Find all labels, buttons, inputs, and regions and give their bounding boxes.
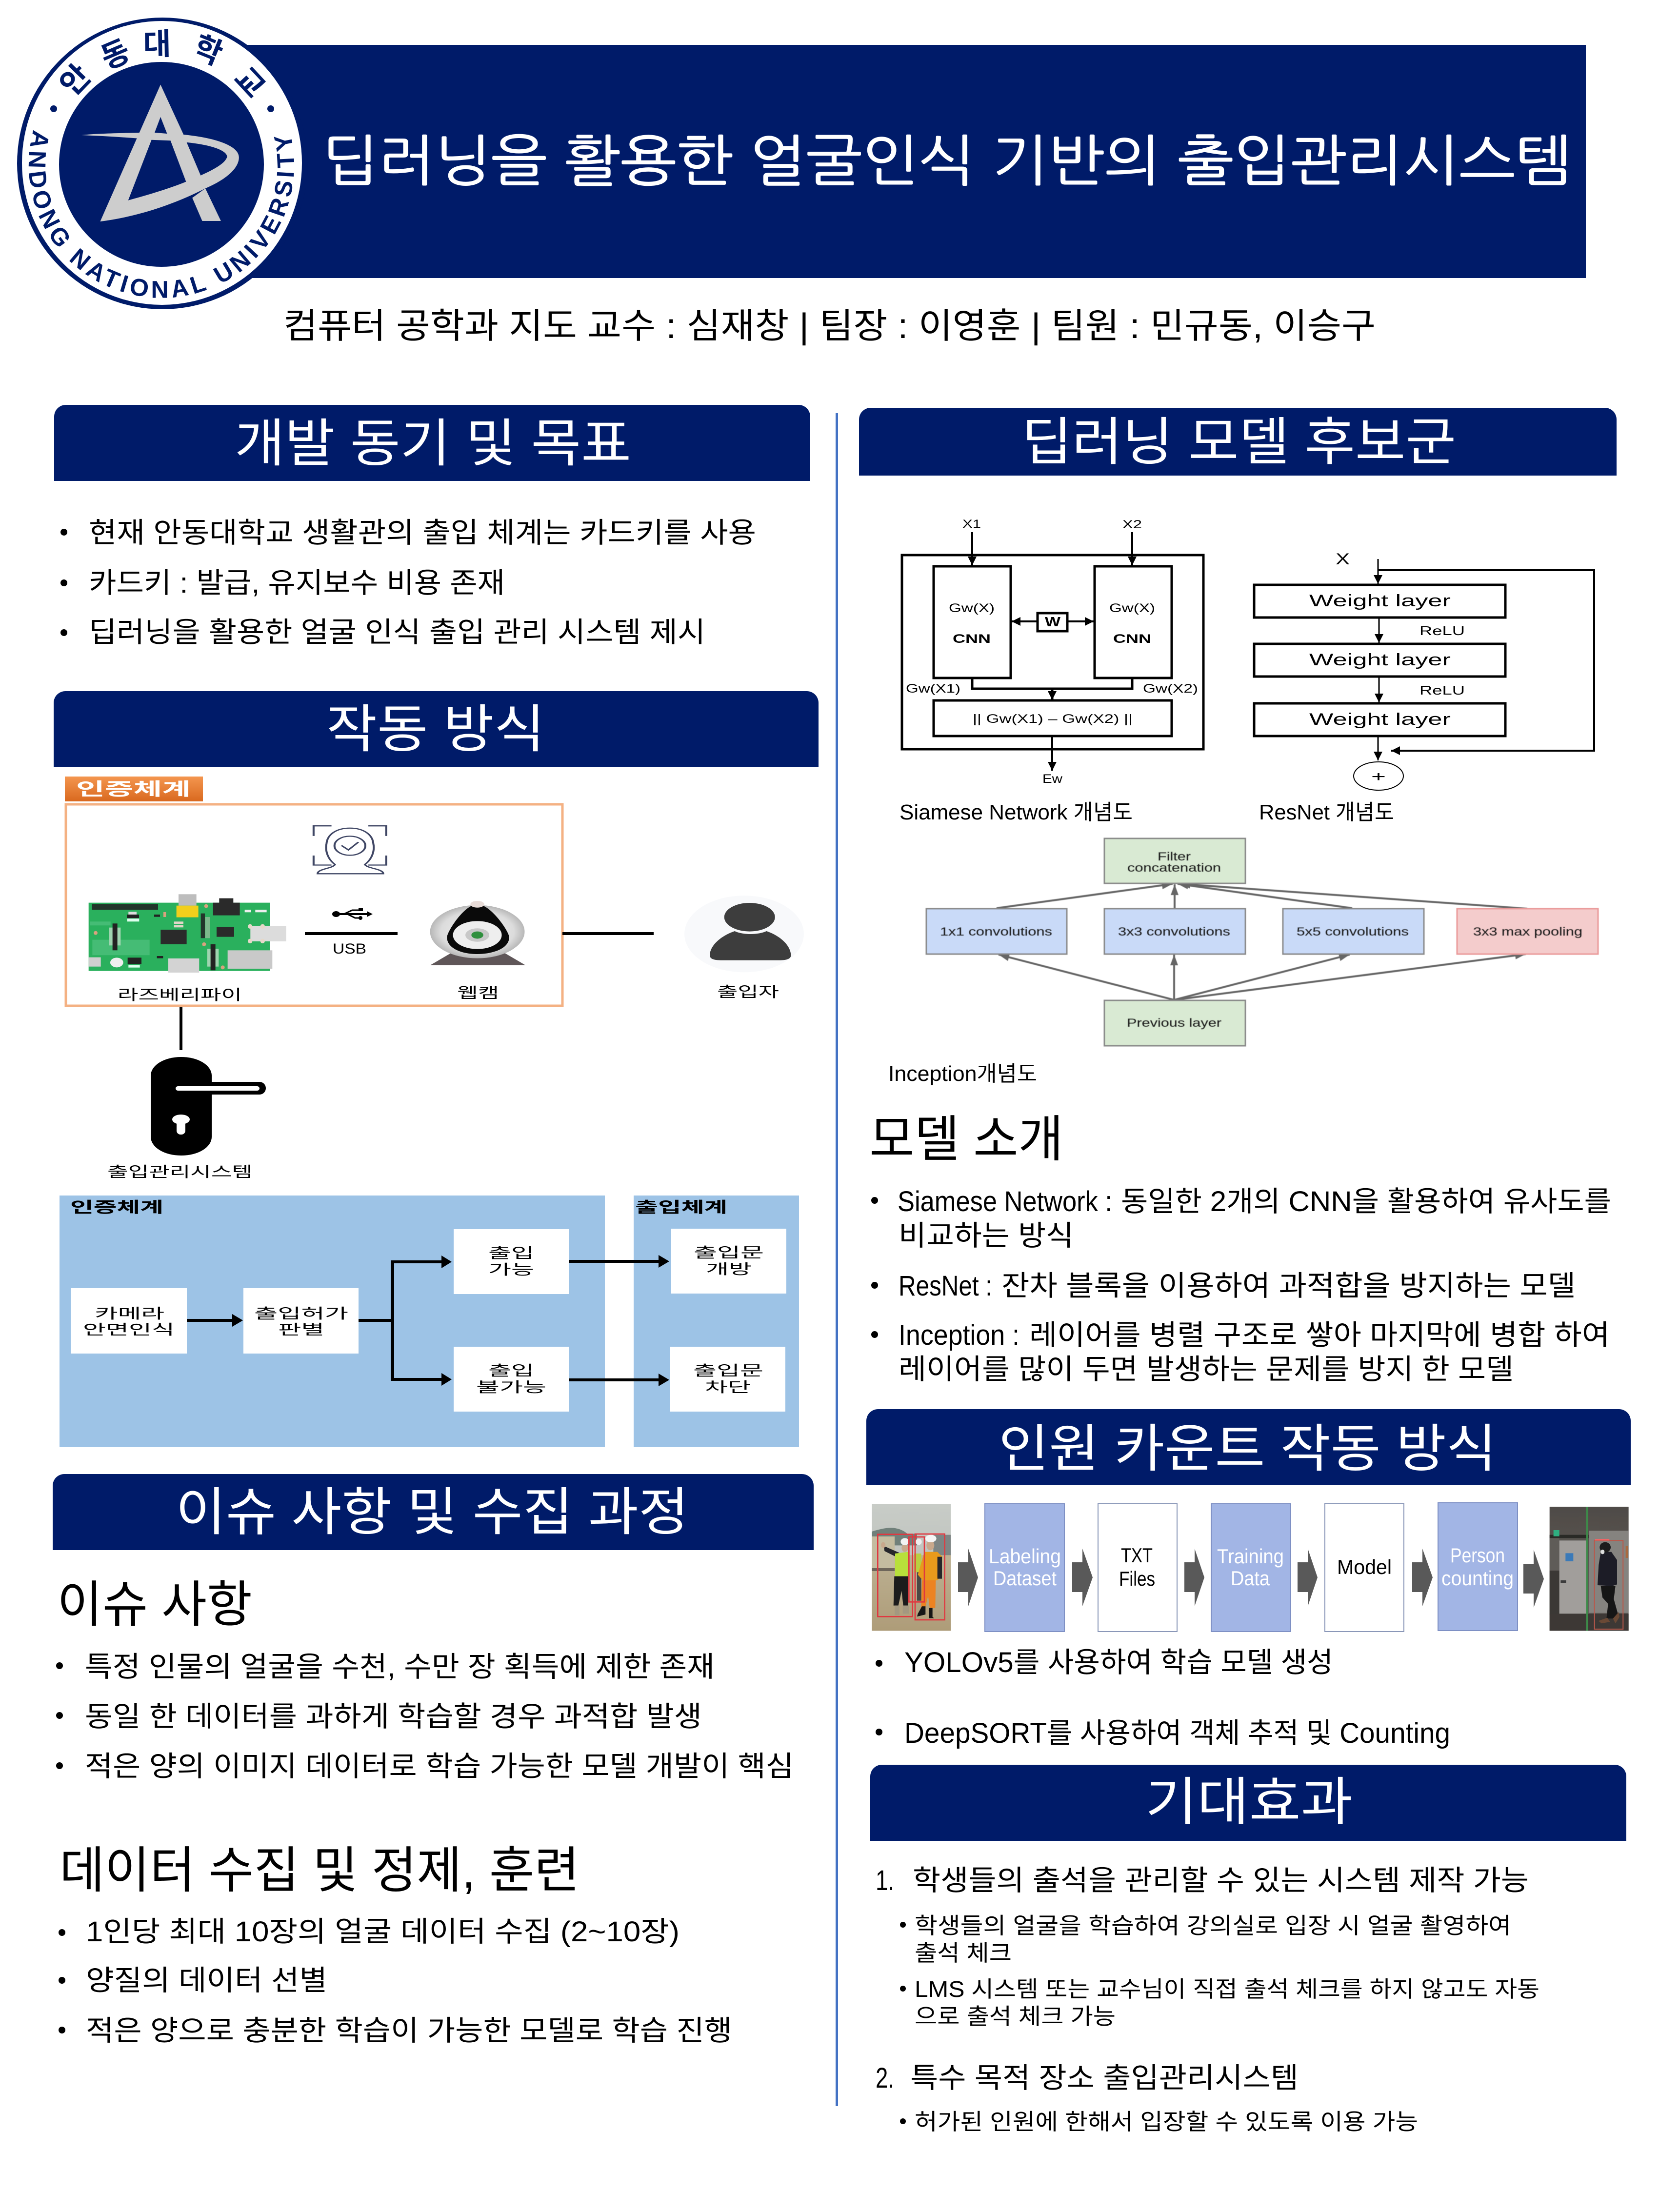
subheading: model introduction: 모델 소개: [869, 1112, 1063, 1167]
heading: motivation: 개발 동기 및 목표: [235, 415, 631, 473]
heading: how it works: 작동 방식: [326, 701, 545, 758]
panel: motivation and goals: [54, 405, 810, 648]
bullet list: model introduction: 레이어를 병렬 구조로 쌓아 마지막에 병합 하여: [1029, 1319, 1610, 1351]
heading: expected effects: 기대효과: [1145, 1774, 1353, 1831]
image: labeled workers photo: [872, 1504, 951, 1631]
box: door blocked: [670, 1347, 785, 1412]
diagram: Inception: 3x3 max pooling: [1473, 925, 1582, 938]
label: entry system: 출입체계: [635, 1199, 727, 1216]
diagram: ResNet: ReLU: [1419, 623, 1465, 638]
diagram: Siamese Network: X2: [1122, 518, 1142, 531]
box: door open: 개방: [706, 1262, 752, 1277]
diagram: Inception: 1x1 convolutions: [940, 925, 1052, 938]
heading: people counting: [866, 1409, 1631, 1485]
box: door open: 출입문: [694, 1245, 764, 1261]
step: Labeling Dataset: Dataset: [993, 1567, 1057, 1590]
diagram: Siamese Network: Gw(X): [949, 601, 995, 615]
image: person counting photo: [1550, 1507, 1629, 1631]
diagram: Siamese Network: W: [1045, 614, 1061, 629]
bullet list: motivation: 딥러닝을 활용한 얼굴 인식 출입 관리 시스템 제시: [89, 617, 705, 648]
box: door open: [671, 1229, 786, 1294]
diagram: ResNet: Weight layer: [1309, 651, 1451, 669]
bullet list: model introduction: 비교하는 방식: [899, 1220, 1074, 1252]
seal: Korean name: 학: [189, 30, 227, 72]
diagram: Siamese Network: Gw(X2): [1143, 682, 1198, 696]
icon: webcam: [430, 901, 526, 965]
box: access denied: 불가능: [476, 1380, 546, 1395]
box: access decision: 출입허가: [254, 1306, 348, 1322]
seal: Korean name: 동: [96, 34, 135, 76]
bullet list: model introduction: Siamese Network :: [898, 1186, 1112, 1217]
step: Model: [1325, 1504, 1404, 1632]
heading: issues and collection: 이슈 사항 및 수집 과정: [176, 1484, 689, 1541]
panel: people counting: [866, 1409, 1631, 1749]
diagram: Siamese Network: X1: [962, 518, 981, 531]
box: camera face recognition: [71, 1288, 187, 1354]
box: access allowed: 출입: [488, 1245, 534, 1261]
heading: expected effects: [870, 1765, 1626, 1841]
tag: authentication system: 인증체계: [76, 779, 191, 799]
heading: people counting: 인원 카운트 작동 방식: [999, 1420, 1497, 1478]
icon: face recognition: [314, 826, 386, 874]
effect 1: attendance system: 학생들의 출석을 관리할 수 있는 시스템 제작 가능: [913, 1865, 1529, 1896]
diagram: ResNet: +: [1371, 769, 1386, 785]
seal: Korean name: 교: [227, 61, 271, 104]
diagram: Siamese Network: Ew: [1042, 772, 1063, 786]
box: camera face recognition: 카메라: [95, 1306, 164, 1322]
bullet list: data collection: [59, 1916, 732, 2047]
seal: A emblem: [81, 84, 239, 221]
diagram: Inception: Filter: [1158, 850, 1191, 863]
diagram: Siamese Network: CNN: [1113, 632, 1151, 646]
panel: entry flow: [634, 1196, 799, 1447]
seal: English name: ANDONG NATIONAL UNIVERSITY: [28, 130, 294, 298]
effect 1: attendance system: 으로 출석 체크 가능: [915, 2004, 1116, 2029]
label: Raspberry Pi: 라즈베리파이: [118, 987, 242, 1003]
bullet list: data collection: 적은 양으로 충분한 학습이 가능한 모델로 학습 진행: [86, 2015, 732, 2047]
panel: issues and data collection: [53, 1474, 814, 2047]
step: TXT Files: TXT: [1121, 1544, 1153, 1567]
box: access allowed: 가능: [488, 1262, 534, 1278]
team credits: 컴퓨터 공학과 지도 교수 : 심재창 | 팀장 : 이영훈 | 팀원 : 민규동, 이승구: [283, 307, 1376, 346]
step: Labeling Dataset: [985, 1504, 1064, 1632]
step: Labeling Dataset: Labeling: [989, 1545, 1061, 1568]
pipeline: labeling to counting: [958, 1503, 1544, 1632]
step: Training Data: [1211, 1504, 1291, 1632]
bullet list: model introduction: Inception :: [899, 1319, 1019, 1351]
bullet list: motivation: [60, 517, 756, 648]
effect 2: restricted areas: 특수 목적 장소 출입관리시스템: [910, 2062, 1299, 2094]
panel: how it works: [54, 691, 819, 1447]
panel: deep learning model candidates: [859, 408, 1617, 1385]
label: USB: USB: [333, 941, 366, 957]
caption: Siamese Network: Siamese Network 개념도: [899, 800, 1133, 824]
step: Model: Model: [1337, 1555, 1392, 1578]
subheading: issues: 이슈 사항: [57, 1577, 252, 1633]
diagram: Siamese Network: CNN: [953, 632, 991, 646]
connector: webcam to person: [562, 932, 654, 935]
effect 2: restricted areas: 허가된 인원에 한해서 입장할 수 있도록 이용 가능: [915, 2109, 1418, 2134]
heading: how it works: [54, 691, 819, 767]
step: Training Data: Training: [1217, 1545, 1284, 1568]
bullet list: motivation: 현재 안동대학교 생활관의 출입 체계는 카드키를 사용: [89, 517, 756, 549]
box: access denied: 출입: [488, 1363, 534, 1379]
bullet list: motivation: 카드키 : 발급, 유지보수 비용 존재: [89, 567, 505, 599]
main title: 딥러닝을 활용한 얼굴인식 기반의 출입관리시스템: [322, 134, 1572, 188]
step: Person counting: Person: [1450, 1544, 1505, 1567]
arrows: pipeline: [958, 1549, 1544, 1608]
icon: door handle: [151, 1057, 266, 1156]
bullet list: model introduction: [871, 1186, 1611, 1385]
bullet list: issues: 적은 양의 이미지 데이터로 학습 가능한 모델 개발이 핵심: [85, 1751, 794, 1782]
bullet list: issues: 동일 한 데이터를 과하게 학습할 경우 과적합 발생: [85, 1701, 702, 1733]
label: webcam: 웹캠: [457, 985, 499, 1001]
connector: board to door lock: [180, 1007, 182, 1050]
effect 1: attendance system: 학생들의 얼굴을 학습하여 강의실로 입장 시 얼굴 촬영하여: [915, 1913, 1511, 1938]
image: Raspberry Pi board: [89, 894, 286, 973]
diagram: Inception: Previous layer: [1127, 1016, 1221, 1030]
seal: Korean name: 대: [143, 28, 171, 61]
seal: Korean name: [54, 28, 271, 104]
diagram: ResNet: Weight layer: [1309, 592, 1451, 610]
box: access allowed: [454, 1229, 569, 1294]
panel: authentication flow: [60, 1196, 605, 1447]
heading: issues and collection: [53, 1474, 814, 1550]
diagram: ResNet: [1254, 550, 1594, 790]
bullet list: people counting: DeepSORT를 사용하여 객체 추적 및 Counting: [904, 1717, 1450, 1749]
flow diagram: authentication and entry: [60, 1196, 799, 1447]
subheading: data collection: 데이터 수집 및 정제, 훈련: [60, 1843, 580, 1898]
bullet list: model introduction: ResNet :: [899, 1270, 992, 1302]
step: TXT Files: Files: [1119, 1567, 1155, 1590]
heading: model candidates: 딥러닝 모델 후보군: [1021, 414, 1456, 471]
icon: person: [684, 896, 804, 972]
box: access decision: [243, 1288, 359, 1354]
icon: USB: [332, 908, 373, 920]
bullet list: data collection: 1인당 최대 10장의 얼굴 데이터 수집 (2~10장): [86, 1916, 680, 1948]
arrows: flow: [187, 1255, 669, 1386]
bullet list: issues: [56, 1651, 794, 1782]
label: authentication system: 인증체계: [70, 1199, 163, 1216]
effect 1: attendance system: LMS 시스템 또는 교수님이 직접 출석 체크를 하지 않고도 자동: [915, 1976, 1539, 2002]
step: Training Data: Data: [1231, 1567, 1270, 1590]
bullet list: people counting: [876, 1647, 1450, 1749]
caption: ResNet: ResNet 개념도: [1259, 800, 1394, 824]
box: door blocked: 차단: [705, 1379, 751, 1395]
diagram: Inception: 3x3 convolutions: [1118, 925, 1230, 938]
label: access control system: 출입관리시스템: [107, 1164, 253, 1180]
authentication box: [66, 804, 562, 1006]
diagram: ResNet: X: [1336, 550, 1350, 568]
panel: expected effects: [870, 1765, 1626, 2134]
step: Person counting: [1438, 1503, 1518, 1631]
diagram: ResNet: ReLU: [1419, 683, 1465, 697]
box: access denied: [454, 1347, 569, 1412]
diagram: Inception: concatenation: [1127, 861, 1221, 875]
diagram: Siamese Network: [902, 518, 1203, 786]
label: visitor: 출입자: [717, 984, 779, 1000]
box: camera face recognition: 안면인식: [83, 1322, 175, 1338]
effect 1: attendance system: 출석 체크: [915, 1940, 1012, 1966]
bullet list: model introduction: 잔차 블록을 이용하여 과적합을 방지하는 모델: [1001, 1270, 1576, 1302]
bullet list: people counting: YOLOv5를 사용하여 학습 모델 생성: [904, 1647, 1333, 1678]
icon: Andong National University seal: [17, 18, 302, 309]
diagram: Siamese Network: || Gw(X1) – Gw(X2) ||: [973, 712, 1133, 726]
bullet list: model introduction: 동일한 2개의 CNN을 활용하여 유사도를: [1121, 1186, 1611, 1217]
effect 2: restricted areas: [876, 2062, 1418, 2134]
diagram: Inception: [926, 838, 1598, 1046]
diagram: Siamese Network: Gw(X1): [906, 682, 960, 696]
diagram: Siamese Network: Gw(X): [1109, 601, 1155, 615]
step: Person counting: counting: [1441, 1567, 1514, 1590]
bullet list: issues: 특정 인물의 얼굴을 수천, 수만 장 획득에 제한 존재: [85, 1651, 715, 1683]
effect 1: attendance system: [876, 1865, 1539, 2029]
effect 1: attendance system: 1.: [876, 1865, 894, 1896]
tag: authentication system: [65, 777, 203, 801]
bullet list: data collection: 양질의 데이터 선별: [86, 1965, 327, 1996]
bullet list: model introduction: 레이어를 많이 두면 발생하는 문제를 방지 한 모델: [899, 1354, 1514, 1385]
box: access decision: 판별: [278, 1322, 324, 1338]
effect 2: restricted areas: 2.: [876, 2062, 894, 2094]
connector: USB line: [305, 932, 398, 935]
seal: Korean name: 안: [54, 59, 97, 102]
step: TXT Files: [1098, 1504, 1177, 1632]
title banner: [195, 45, 1586, 278]
diagram: ResNet: Weight layer: [1309, 710, 1451, 729]
box: door blocked: 출입문: [693, 1363, 763, 1379]
heading: motivation: [54, 405, 810, 481]
column divider: [836, 413, 838, 2106]
caption: Inception: Inception개념도: [888, 1062, 1037, 1086]
diagram: Inception: 5x5 convolutions: [1297, 925, 1409, 938]
heading: model candidates: [859, 408, 1617, 476]
